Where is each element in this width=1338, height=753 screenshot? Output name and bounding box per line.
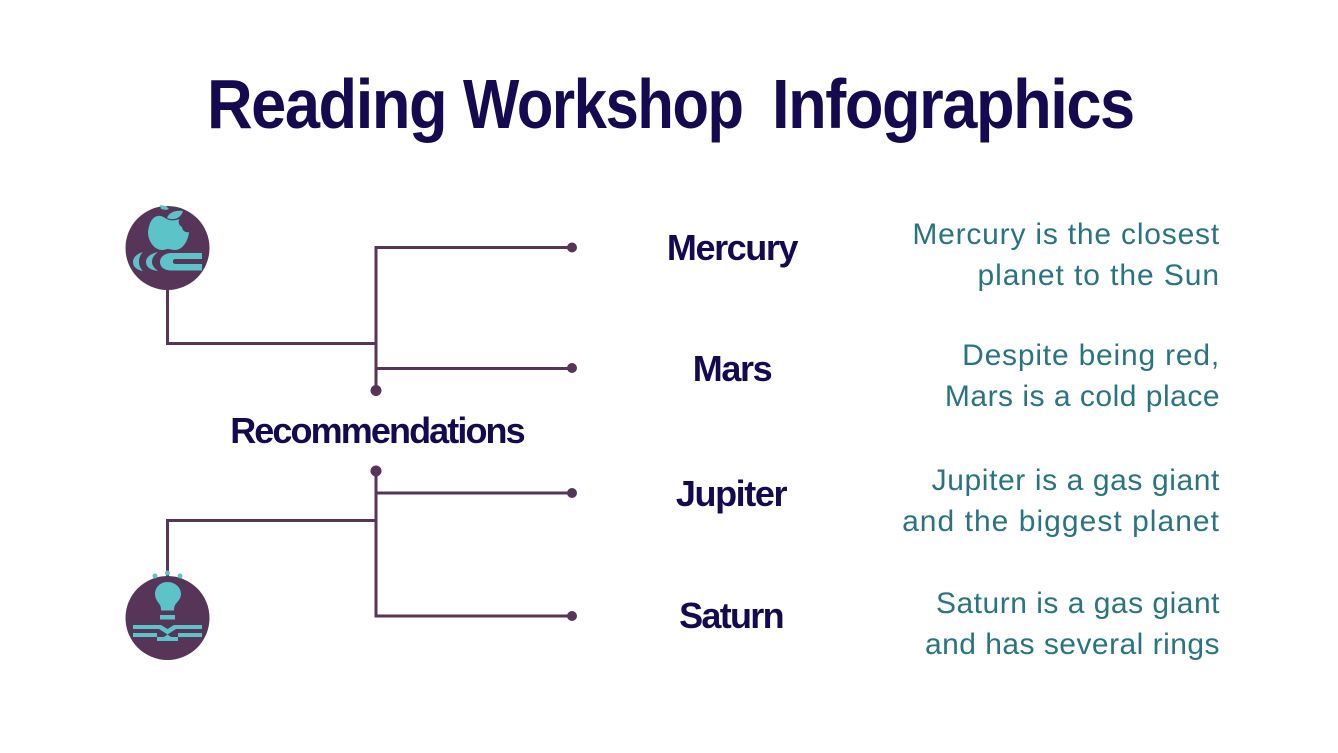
text: Saturn description (925, 587, 1220, 661)
connector lines: bottom branch (168, 466, 577, 621)
text: Mars description: Mars is a cold place (945, 380, 1220, 413)
title: Infographics (772, 65, 1134, 143)
text: Saturn description: and has several rings (925, 628, 1220, 661)
title: Reading (207, 65, 446, 143)
label: Mars: Mars (693, 348, 771, 389)
text: Mercury description: planet to the Sun (978, 259, 1220, 292)
title: Workshop (463, 65, 743, 143)
connector lines: top branch (168, 242, 577, 396)
text: Saturn description: Saturn is a gas giant (936, 587, 1220, 620)
label: Saturn: Saturn (679, 595, 783, 636)
text: Jupiter description: Jupiter is a gas giant (932, 464, 1220, 497)
text: Jupiter description: and the biggest planet (902, 505, 1220, 538)
text: Mercury description: Mercury is the closest (912, 218, 1220, 251)
icon: apple on books (126, 205, 210, 290)
icon: light bulb over open book (126, 570, 210, 660)
text: Jupiter description (902, 464, 1220, 538)
text: Mars description (945, 339, 1220, 413)
text: Mars description: Despite being red, (962, 339, 1220, 372)
title (207, 65, 1134, 143)
label: Mercury: Mercury (667, 227, 797, 268)
label: Jupiter: Jupiter (676, 473, 786, 514)
heading: Recommendations: Recommendations (230, 410, 524, 451)
text: Mercury description (912, 218, 1220, 292)
